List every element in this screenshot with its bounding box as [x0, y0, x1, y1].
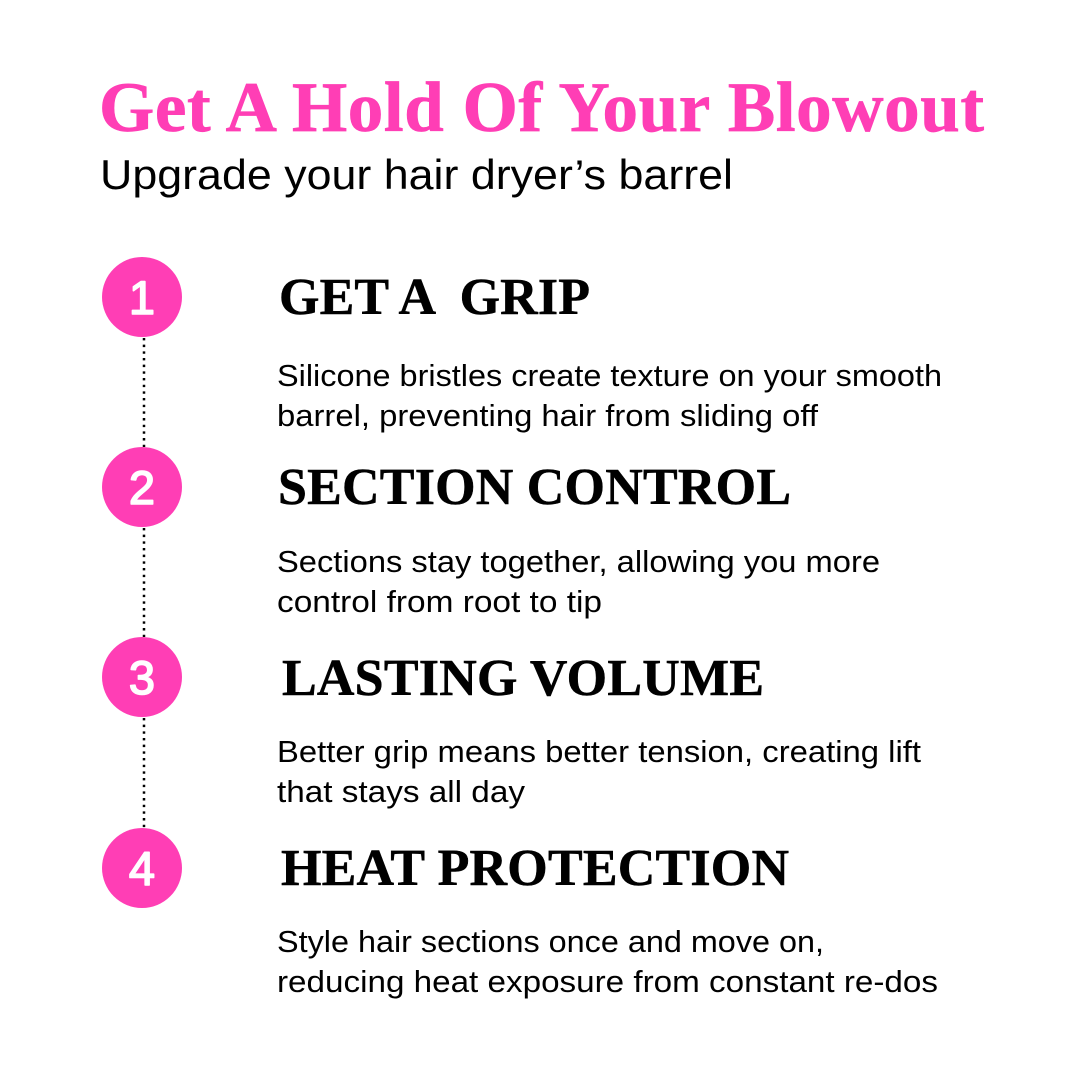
step 3 badge: 3 [129, 651, 155, 704]
step 2 text [277, 544, 880, 619]
step 3 heading: LASTING VOLUME [282, 650, 764, 707]
step 4 badge: 4 [129, 842, 155, 895]
title: Get A Hold Of Your Blowout [99, 69, 984, 147]
step 3 text [277, 734, 921, 809]
dotted connector 3 to 4 [143, 718, 145, 828]
step 1 badge [102, 257, 182, 337]
step 2 badge: 2 [129, 461, 155, 514]
step 2 heading: SECTION CONTROL [278, 459, 791, 516]
step 4 badge [102, 828, 182, 908]
step 2 text: Sections stay together, allowing you more [277, 544, 880, 579]
step 3 text: that stays all day [277, 774, 526, 809]
step 1 text: Silicone bristles create texture on your smooth [277, 358, 942, 393]
step 2 text: control from root to tip [277, 584, 602, 619]
step 4 text: Style hair sections once and move on, [277, 924, 824, 959]
step 1 heading: GET A GRIP [279, 269, 590, 326]
step 2 badge [102, 447, 182, 527]
dotted connector 1 to 2 [143, 338, 145, 447]
step 4 text: reducing heat exposure from constant re-dos [277, 964, 938, 999]
step 1 text: barrel, preventing hair from sliding off [277, 398, 818, 433]
step 4 heading: HEAT PROTECTION [281, 840, 789, 897]
step 1 text [277, 358, 942, 433]
dotted connector 2 to 3 [143, 528, 145, 637]
step 3 badge [102, 637, 182, 717]
step 4 text [277, 924, 938, 999]
step 1 badge: 1 [129, 271, 155, 324]
subtitle: Upgrade your hair dryer’s barrel [100, 151, 733, 198]
step 3 text: Better grip means better tension, creating lift [277, 734, 921, 769]
